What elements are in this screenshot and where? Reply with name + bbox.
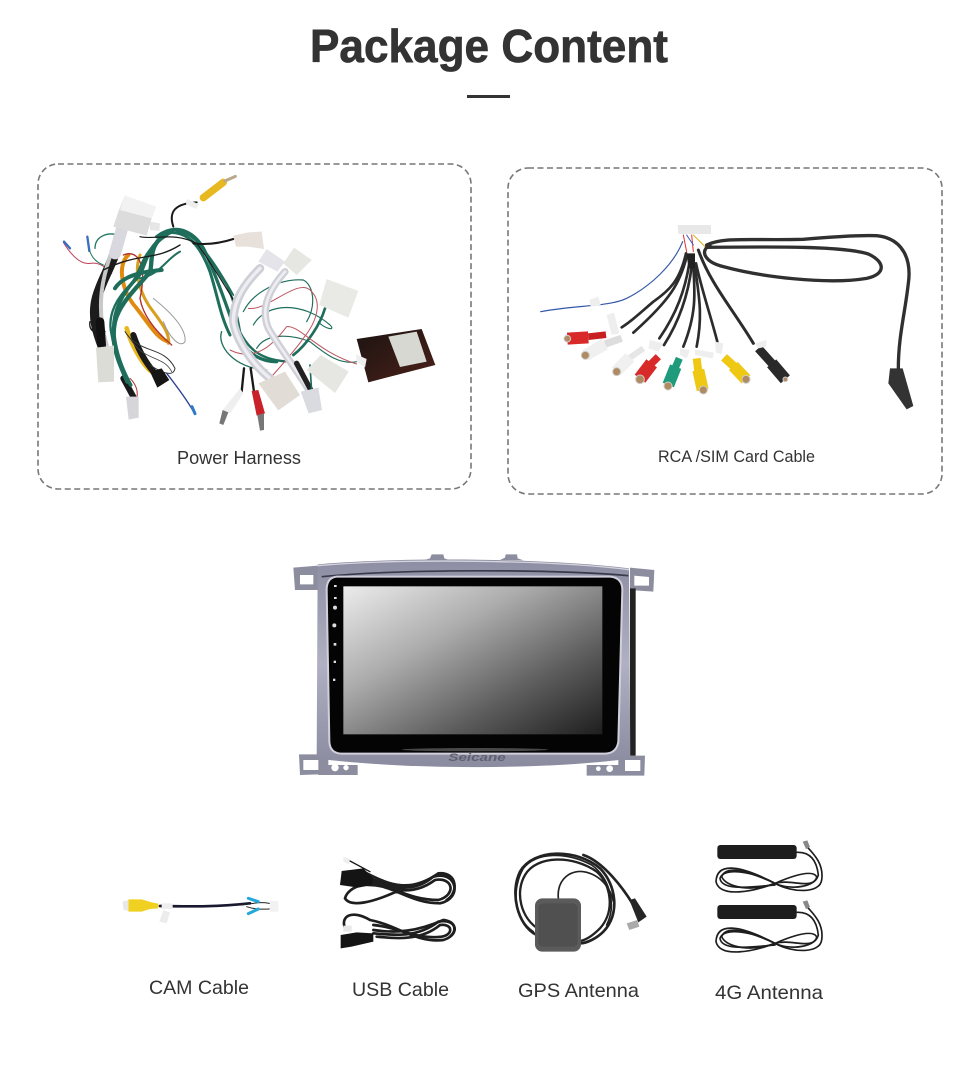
image: power harness wiring [63,176,435,431]
bezel [317,560,630,767]
label: RCA SIM card cable: RCA /SIM Card Cable [658,448,815,466]
RCA plugs [567,335,785,390]
item: USB cable [340,857,455,1001]
label: GPS antenna: GPS Antenna [518,980,639,1002]
panel: RCA SIM card cable [508,168,942,494]
display gradient [343,586,602,734]
label: CAM cable: CAM Cable [149,977,249,999]
item: GPS antenna [515,854,647,1002]
item: CAM cable [123,898,278,999]
image: USB cable [340,857,455,948]
screen glass [327,577,622,754]
title underline [467,95,510,98]
image: head unit radio [293,554,654,776]
brand logo: Seicane [448,752,506,764]
panel: power harness [38,164,471,489]
image: 4G antennas [716,840,822,952]
label: USB cable: USB Cable [352,979,449,1001]
image: GPS antenna [515,854,647,952]
label: 4G antenna: 4G Antenna [715,982,823,1004]
image: RCA and SIM cable [541,225,913,409]
title: Package Content [310,20,668,72]
label: power harness: Power Harness [177,448,301,468]
image: CAM cable [123,898,278,923]
item: 4G antenna [715,840,823,1004]
